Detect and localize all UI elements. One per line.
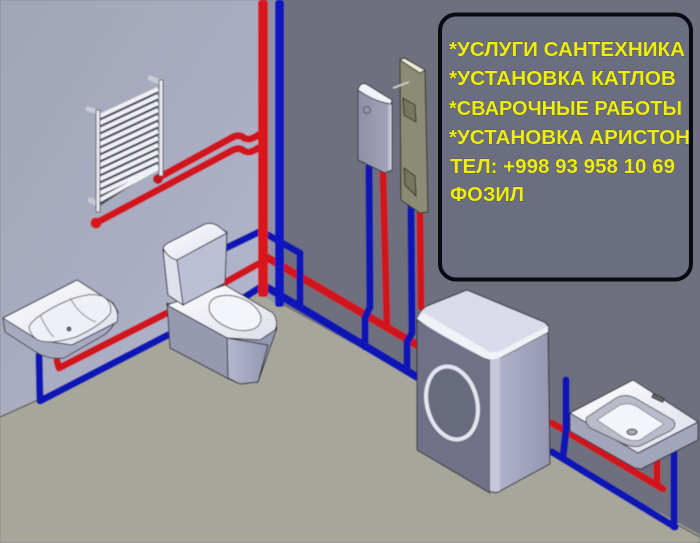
icon: right washbasin xyxy=(570,380,698,469)
icon: wall panel xyxy=(393,58,428,213)
icon: washing machine xyxy=(417,290,550,493)
icon: water heater xyxy=(358,84,392,173)
main risers xyxy=(258,0,284,307)
icon: toilet xyxy=(163,223,277,384)
services and contact text: ФОЗИЛ xyxy=(450,184,524,206)
icon: heated towel rail xyxy=(88,78,163,228)
services and contact text: *СВАРОЧНЫЕ РАБОТЫ xyxy=(449,98,682,120)
services and contact text: ТЕЛ: +998 93 958 10 69 xyxy=(450,156,675,178)
services and contact text: *УСТАНОВКА АРИСТОН xyxy=(449,127,690,149)
cold water pipes xyxy=(39,167,675,527)
services and contact text: *УСТАНОВКА КАТЛОВ xyxy=(449,68,676,90)
services and contact text: *УСЛУГИ САНТЕХНИКА xyxy=(449,39,685,61)
services and contact text xyxy=(449,39,690,206)
hot water pipes xyxy=(57,135,663,489)
icon: left washbasin xyxy=(3,280,118,358)
callout: services panel xyxy=(440,14,691,280)
